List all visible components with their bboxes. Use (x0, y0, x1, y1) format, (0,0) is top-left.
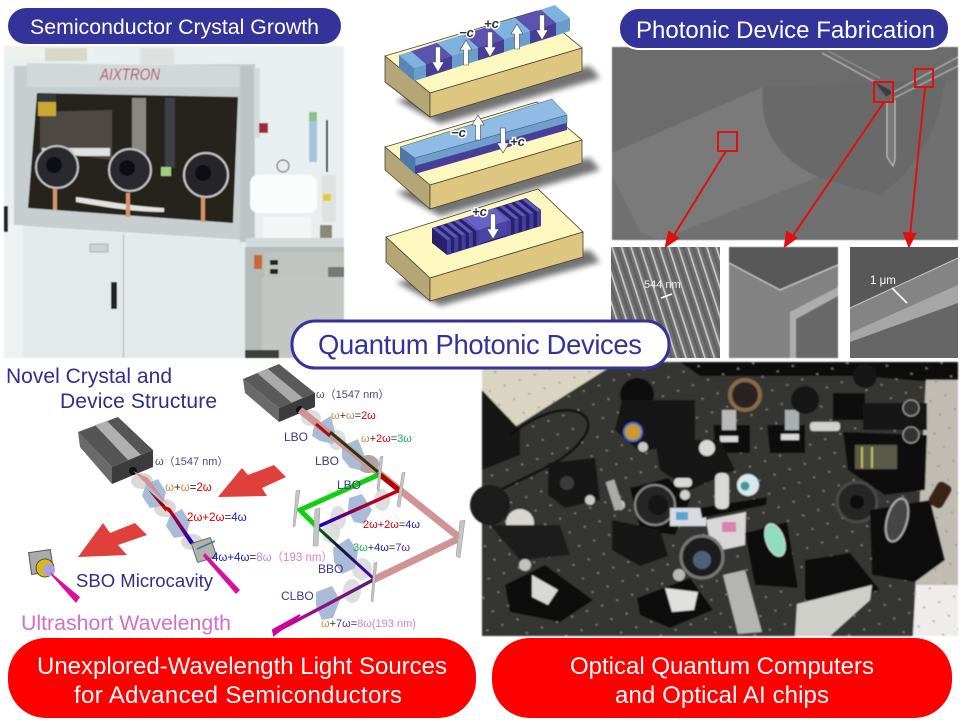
photo: crystal growth glovebox (4, 46, 344, 358)
side equipment (240, 66, 254, 242)
crystal device diagrams (385, 5, 600, 306)
wavelength label: ω（1547 nm） (316, 388, 389, 401)
wavelength label: ω（1547 nm） (155, 455, 228, 468)
heading: photonic device fabrication (619, 8, 949, 49)
window (28, 93, 238, 223)
laser (78, 417, 153, 484)
equation 2ω+2ω: 2ω+2ω=4ω (363, 519, 420, 531)
device 1: periodically poled (385, 5, 600, 124)
label CLBO: CLBO (281, 589, 314, 603)
rear mounts (620, 378, 654, 412)
width label: 1 μm (870, 275, 896, 287)
device 1: periodically poled: +c (484, 16, 500, 31)
equation 3ω+4ω: 3ω+4ω=7ω (353, 542, 410, 554)
big red arrow 2 (78, 523, 147, 557)
equation ω+7ω: ω+7ω=8ω(193 nm) (321, 618, 416, 630)
equation 1: ω+ω=2ω (165, 482, 212, 494)
heading: quantum photonic devices (292, 321, 669, 368)
grating period label: 544 nm (644, 279, 681, 291)
left mounts (470, 485, 510, 525)
monitor and cable (482, 390, 520, 470)
equation ω+ω: ω+ω=2ω (331, 410, 376, 422)
setup diagram: cascaded nonlinear conversion (243, 364, 465, 635)
device 2: thin-film waveguide: +c (510, 134, 526, 149)
main SEM view (612, 47, 958, 240)
mirrors (293, 456, 465, 602)
beam path (133, 471, 198, 548)
heading: quantum photonic devices: Quantum Photonic Devices (318, 329, 642, 360)
label BBO: BBO (318, 562, 343, 576)
glove ports (36, 146, 228, 222)
callout: quantum computers: Optical Quantum Computers (570, 653, 874, 680)
heading: semiconductor crystal growth: Semiconductor Crystal Growth (30, 15, 319, 39)
glovebox frame (14, 64, 255, 241)
label LBO 2: LBO (315, 454, 339, 468)
equation ω+2ω: ω+2ω=3ω (361, 433, 412, 445)
machine brand: AIXTRON (99, 65, 161, 84)
red zoom markers and arrows (666, 69, 933, 246)
front mounts (505, 565, 593, 622)
laser (243, 364, 315, 422)
lower cabinet (23, 227, 245, 358)
callout: light sources: Unexplored-Wavelength Light Sources (37, 653, 447, 680)
microcavity (191, 537, 240, 594)
label LBO 3: LBO (337, 478, 361, 492)
centre assembly (630, 478, 690, 535)
SEM zoom: 1 micrometre waveguide (850, 247, 958, 358)
SEM images: photonic device fabrication (611, 47, 958, 358)
photo: optical table (470, 362, 958, 636)
equation 2: 2ω+2ω=4ω (187, 512, 247, 524)
device 2: thin-film waveguide: −c (451, 125, 467, 140)
heading: semiconductor crystal growth (8, 8, 341, 44)
device 2: thin-film waveguide (385, 99, 600, 216)
text: device structure: Device Structure (60, 390, 217, 413)
callout: quantum computers: and Optical AI chips (615, 682, 829, 709)
lenses and crystals (131, 473, 203, 550)
packaged device and output beam (29, 550, 80, 603)
text: SBO microcavity: SBO Microcavity (76, 570, 214, 591)
label LBO 1: LBO (284, 430, 308, 444)
setup diagram: microcavity light source (6, 365, 333, 635)
equation 3: 4ω+4ω=8ω（193 nm） (212, 551, 333, 564)
device 3: grating on substrate (386, 189, 600, 306)
callout: quantum computers (492, 638, 952, 718)
callout: light sources: for Advanced Semiconductors (74, 682, 402, 709)
large black instrument (863, 403, 927, 430)
optics (301, 410, 390, 620)
text: ultrashort wavelength: Ultrashort Wavelength (21, 611, 231, 635)
callout: light sources (8, 638, 476, 718)
device 1: periodically poled: −c (459, 25, 475, 40)
big red arrow 1 (218, 465, 286, 497)
beams (273, 410, 460, 635)
SEM zoom: waveguide corner (729, 247, 838, 358)
heading: photonic device fabrication: Photonic Device Fabrication (636, 17, 935, 44)
SEM zoom: grating 544 nm (611, 247, 720, 358)
text: novel crystal: Novel Crystal and (6, 365, 172, 388)
device 3: grating on substrate: +c (472, 204, 488, 219)
